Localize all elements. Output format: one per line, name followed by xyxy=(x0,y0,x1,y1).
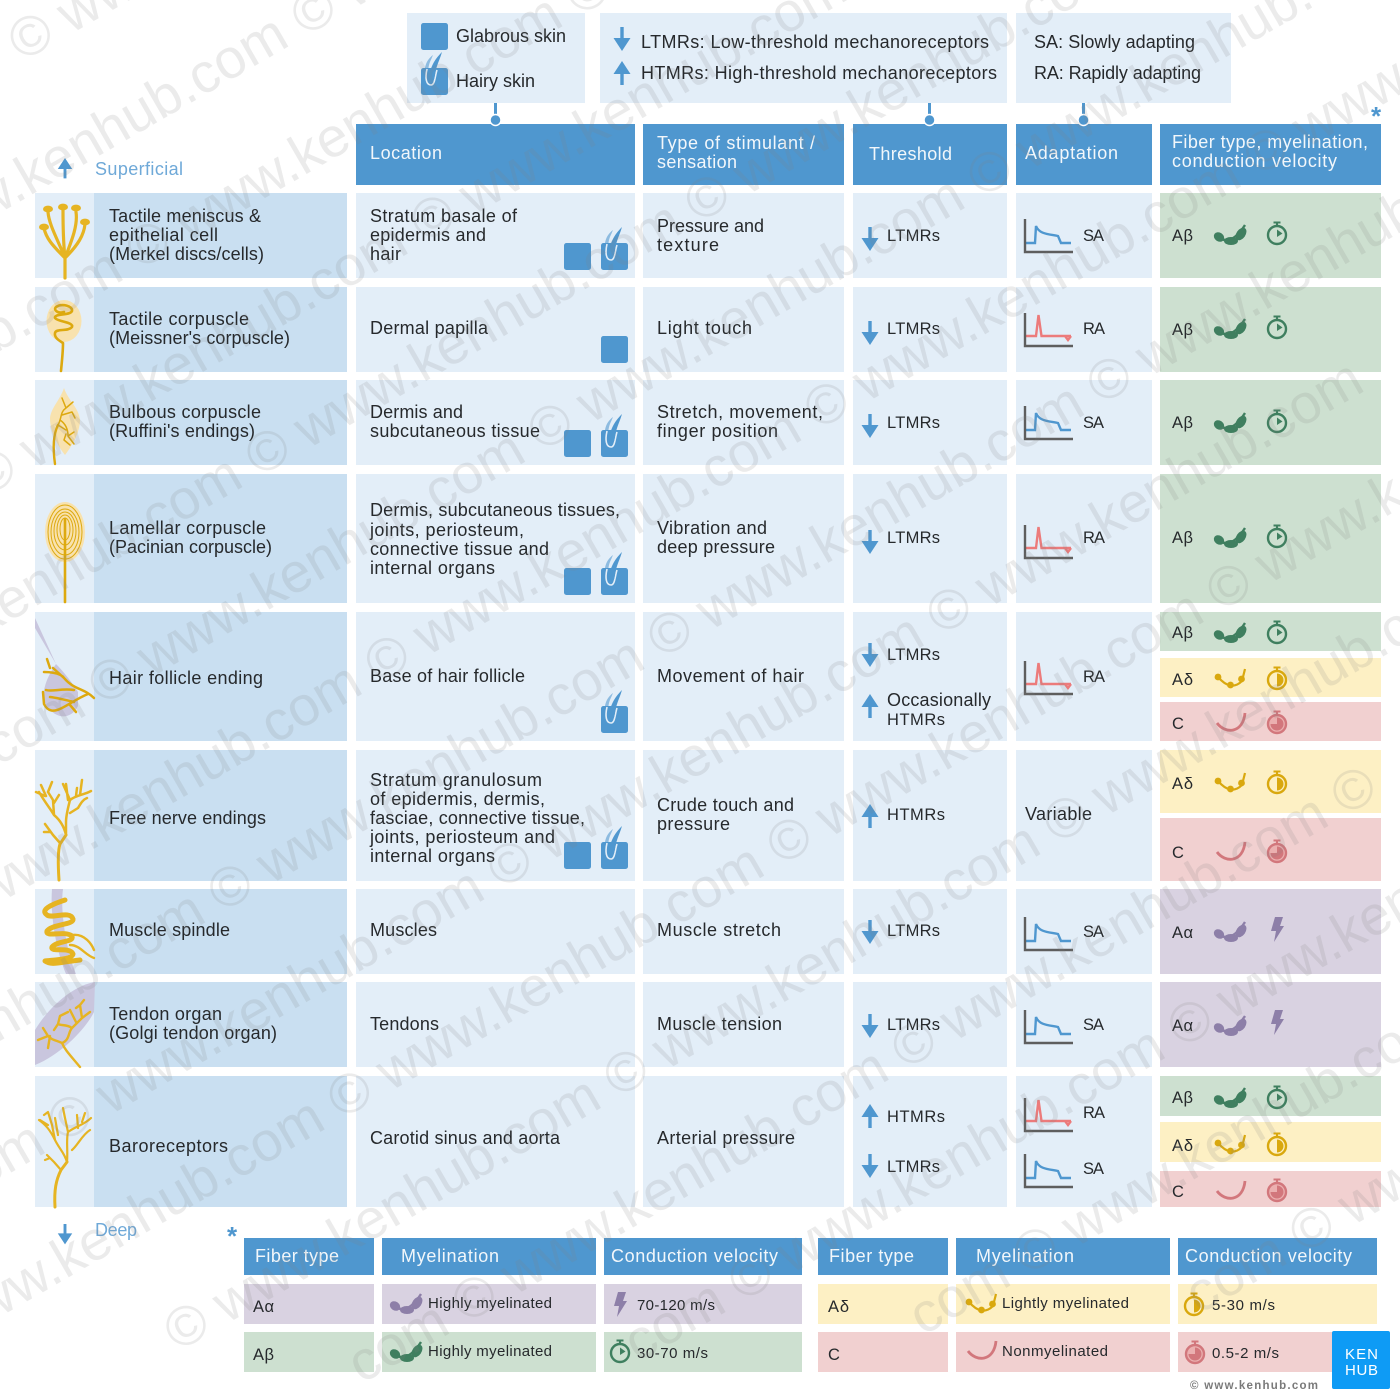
icon: Pacinian corpuscle xyxy=(45,502,85,602)
threshold: HTMRs xyxy=(887,1108,945,1126)
icon: up arrow xyxy=(614,61,630,85)
location xyxy=(369,500,628,595)
icon: hair follicle xyxy=(35,618,94,716)
receptor name xyxy=(109,1004,277,1043)
key table: fiber types A-delta and C: Fiber type xyxy=(829,1246,914,1266)
table header row: Type of stimulant / xyxy=(657,133,815,153)
threshold xyxy=(862,529,940,554)
location: hair xyxy=(370,244,401,264)
adaptation xyxy=(1025,219,1104,252)
key row: C: 0.5-2 m/s xyxy=(1212,1345,1279,1362)
receptor name: (Golgi tendon organ) xyxy=(109,1023,277,1043)
key row: A-alpha: 70-120 m/s xyxy=(637,1297,715,1314)
adaptation xyxy=(1025,313,1105,346)
row: bulbous corpuscle xyxy=(35,380,1381,465)
receptor name: Free nerve endings xyxy=(109,808,266,828)
stimulant: Crude touch and xyxy=(657,795,794,815)
threshold xyxy=(862,920,940,944)
adaptation: RA xyxy=(1083,529,1105,547)
fiber type: Aβ xyxy=(1172,321,1193,339)
threshold xyxy=(862,227,940,251)
receptor name: Lamellar corpuscle xyxy=(109,518,266,538)
location: Stratum basale of xyxy=(370,206,518,226)
row: hair follicle ending xyxy=(35,612,1381,741)
location: epidermis and xyxy=(370,225,486,245)
icon: hairy skin xyxy=(421,52,448,95)
threshold xyxy=(862,414,940,438)
key row: A-delta: Aδ xyxy=(828,1298,849,1316)
fiber type A-beta xyxy=(1160,612,1381,651)
receptor name: epithelial cell xyxy=(109,225,218,245)
receptor name: Bulbous corpuscle xyxy=(109,402,261,422)
receptor name xyxy=(109,402,261,441)
adaptation: SA xyxy=(1083,1160,1104,1178)
fiber type xyxy=(1172,917,1284,942)
location: Dermis and xyxy=(370,402,463,422)
receptor name: (Meissner's corpuscle) xyxy=(109,328,290,348)
icon: Golgi tendon organ xyxy=(35,982,95,1067)
fiber type A-delta xyxy=(1160,1122,1381,1162)
receptor name xyxy=(109,206,264,264)
location: Carotid sinus and aorta xyxy=(370,1128,561,1148)
stimulant: deep pressure xyxy=(657,537,775,557)
key row: A-delta xyxy=(818,1284,1377,1324)
legend: adaptation definitions: SA: Slowly adapting xyxy=(1034,32,1195,52)
location: Dermal papilla xyxy=(370,318,489,338)
key row: A-beta: Highly myelinated xyxy=(428,1343,552,1360)
fiber type: Aβ xyxy=(1172,414,1193,432)
key row: A-beta: 30-70 m/s xyxy=(637,1345,708,1362)
row: tactile meniscus xyxy=(35,193,1381,278)
key row: A-alpha: Highly myelinated xyxy=(428,1295,552,1312)
fiber type A-delta xyxy=(1160,750,1381,813)
fiber type: Aα xyxy=(1172,924,1193,942)
receptor name: Tendon organ xyxy=(109,1004,222,1024)
label: HTMRs: HTMRs: High-threshold mechanoreceptors xyxy=(641,63,997,83)
location: Tendons xyxy=(370,1014,439,1034)
threshold: HTMRs xyxy=(887,711,945,729)
location: internal organs xyxy=(370,558,495,578)
adaptation: RA xyxy=(1083,320,1105,338)
adaptation xyxy=(1025,1010,1104,1043)
key row: A-alpha xyxy=(244,1284,802,1324)
table header row: conduction velocity xyxy=(1172,151,1337,171)
location xyxy=(370,206,628,270)
adaptation xyxy=(1025,661,1105,694)
adaptation xyxy=(1025,917,1104,950)
fiber type xyxy=(1172,524,1286,548)
stimulant: Movement of hair xyxy=(657,666,804,686)
key table: fiber types A-alpha and A-beta: Conduction velocity xyxy=(611,1246,778,1266)
stimulant: Muscle stretch xyxy=(657,920,781,940)
adaptation xyxy=(1025,525,1105,558)
location: Muscles xyxy=(370,920,437,940)
location: joints, periosteum and xyxy=(369,827,555,847)
adaptation: RA xyxy=(1083,668,1105,686)
table header row: Fiber type, myelination, xyxy=(1172,132,1368,152)
copyright: © www.kenhub.com xyxy=(1190,1380,1318,1392)
key row: A-alpha: Aα xyxy=(253,1298,274,1316)
fiber type A-delta: Aδ xyxy=(1172,671,1193,689)
legend: adaptation definitions xyxy=(1016,13,1231,103)
receptor name: Hair follicle ending xyxy=(109,668,263,688)
location: fasciae, connective tissue, xyxy=(370,808,585,828)
stimulant xyxy=(657,402,823,441)
logo: Kenhub xyxy=(1332,1331,1390,1389)
adaptation xyxy=(1025,406,1104,439)
legend connector pins xyxy=(490,103,1089,126)
threshold xyxy=(862,804,945,828)
legend: adaptation definitions: RA: Rapidly adapting xyxy=(1034,63,1201,83)
fiber type C: C xyxy=(1172,1183,1184,1201)
threshold xyxy=(862,1014,940,1038)
location xyxy=(370,666,628,733)
row: free nerve endings xyxy=(35,750,1381,881)
table header row: Adaptation xyxy=(1025,143,1118,163)
key table: fiber types A-delta and C: Myelination xyxy=(976,1246,1074,1266)
receptor name: (Ruffini's endings) xyxy=(109,421,255,441)
asterisk top: * xyxy=(1371,101,1382,131)
location: Base of hair follicle xyxy=(370,666,525,686)
threshold: LTMRs xyxy=(887,414,940,432)
fiber type A-delta: Aδ xyxy=(1172,775,1193,793)
location xyxy=(370,318,628,363)
icon: glabrous skin xyxy=(421,23,448,50)
stimulant xyxy=(657,216,764,255)
fiber type A-beta: Aβ xyxy=(1172,624,1193,642)
row: tendon organ xyxy=(35,982,1381,1067)
fiber type C: C xyxy=(1172,715,1184,733)
icon: Ruffini ending xyxy=(50,388,80,464)
fiber type C xyxy=(1160,702,1381,741)
table header row xyxy=(356,124,1381,185)
stimulant: texture xyxy=(657,235,719,255)
stimulant: Arterial pressure xyxy=(657,1128,795,1148)
stimulant: Light touch xyxy=(657,318,752,338)
fiber type: Aβ xyxy=(1172,529,1193,547)
icon: down arrow xyxy=(614,27,630,51)
threshold: LTMRs xyxy=(887,646,940,664)
stimulant xyxy=(657,795,794,834)
asterisk bottom: * xyxy=(227,1221,238,1251)
key table: fiber types A-delta and C xyxy=(818,1238,1377,1372)
key row: A-delta: Lightly myelinated xyxy=(1002,1295,1129,1312)
location xyxy=(370,402,628,457)
stimulant: finger position xyxy=(657,421,778,441)
deep direction xyxy=(58,1220,137,1244)
key table: fiber types A-alpha and A-beta: Myelination xyxy=(401,1246,499,1266)
fiber type xyxy=(1172,1010,1284,1036)
key row: A-beta xyxy=(244,1332,802,1372)
receptor name xyxy=(109,518,272,557)
row: baroreceptors xyxy=(35,1076,1381,1207)
location: joints, periosteum, xyxy=(369,520,524,540)
table header row: Threshold xyxy=(869,144,952,164)
icon: baroreceptor xyxy=(39,1108,91,1207)
threshold xyxy=(862,320,940,345)
superficial direction xyxy=(58,158,183,179)
row: tactile corpuscle xyxy=(35,287,1381,372)
threshold: Occasionally xyxy=(887,690,991,710)
stimulant: pressure xyxy=(657,814,730,834)
fiber type A-beta xyxy=(1160,1076,1381,1116)
fiber type C: C xyxy=(1172,844,1184,862)
threshold: LTMRs xyxy=(887,1016,940,1034)
location: Dermis, subcutaneous tissues, xyxy=(370,500,620,520)
key row: C: Nonmyelinated xyxy=(1002,1343,1108,1360)
threshold: LTMRs xyxy=(887,320,940,338)
legend: threshold definitions xyxy=(600,13,1007,103)
receptor name: Baroreceptors xyxy=(109,1136,228,1156)
adaptation: SA xyxy=(1083,1016,1104,1034)
receptor name: Tactile meniscus & xyxy=(109,206,261,226)
key row: A-beta: Aβ xyxy=(253,1346,274,1364)
fiber type C xyxy=(1160,1171,1381,1207)
key table: fiber types A-alpha and A-beta: Fiber type xyxy=(255,1246,339,1266)
superficial direction: Superficial xyxy=(95,159,183,179)
receptor name xyxy=(109,309,290,348)
location: of epidermis, dermis, xyxy=(370,789,545,809)
key row: A-delta: 5-30 m/s xyxy=(1212,1297,1275,1314)
logo: Kenhub: HUB xyxy=(1345,1362,1378,1379)
stimulant: Stretch, movement, xyxy=(657,402,823,422)
stimulant: Pressure and xyxy=(657,216,764,236)
adaptation: SA xyxy=(1083,923,1104,941)
adaptation: RA xyxy=(1083,1104,1105,1122)
adaptation: SA xyxy=(1083,414,1104,432)
fiber type C xyxy=(1160,818,1381,881)
threshold: LTMRs xyxy=(887,922,940,940)
label: hairy skin: Hairy skin xyxy=(456,71,535,91)
row: lamellar corpuscle xyxy=(35,474,1381,603)
icon: muscle spindle xyxy=(45,889,94,974)
icon: Meissner corpuscle xyxy=(46,300,82,371)
key row: C xyxy=(818,1332,1377,1372)
stimulant xyxy=(657,518,775,557)
location: Stratum granulosum xyxy=(370,770,542,790)
fiber type: Aα xyxy=(1172,1017,1193,1035)
key table: fiber types A-alpha and A-beta xyxy=(244,1238,802,1372)
adaptation xyxy=(1025,1098,1105,1187)
table header row: sensation xyxy=(657,152,737,172)
icon: Merkel cell xyxy=(39,204,90,278)
threshold xyxy=(862,1104,945,1178)
location: connective tissue and xyxy=(370,539,549,559)
fiber type xyxy=(1172,222,1286,245)
receptor name: (Pacinian corpuscle) xyxy=(109,537,272,557)
stimulant: Vibration and xyxy=(657,518,767,538)
threshold: LTMRs xyxy=(887,227,940,245)
row: muscle spindle xyxy=(35,889,1381,974)
receptor name: (Merkel discs/cells) xyxy=(109,244,264,264)
legend: skin types xyxy=(407,13,585,103)
location xyxy=(369,770,628,869)
label: LTMRs: LTMRs: Low-threshold mechanoreceptors xyxy=(641,32,989,52)
deep direction: Deep xyxy=(95,1220,137,1240)
fiber type A-delta xyxy=(1160,658,1381,697)
threshold: LTMRs xyxy=(887,1158,940,1176)
fiber type A-beta: Aβ xyxy=(1172,1089,1193,1107)
key table: fiber types A-delta and C: Conduction velocity xyxy=(1185,1246,1352,1266)
label: glabrous skin: Glabrous skin xyxy=(456,26,566,46)
key row: C: C xyxy=(828,1346,840,1364)
logo: Kenhub: KEN xyxy=(1345,1346,1378,1363)
fiber type A-delta: Aδ xyxy=(1172,1137,1193,1155)
location: internal organs xyxy=(370,846,495,866)
receptor name: Tactile corpuscle xyxy=(109,309,249,329)
fiber type: Aβ xyxy=(1172,227,1193,245)
stimulant: Muscle tension xyxy=(657,1014,782,1034)
threshold xyxy=(862,643,991,729)
table header row: Location xyxy=(370,143,442,163)
threshold: HTMRs xyxy=(887,806,945,824)
location: subcutaneous tissue xyxy=(370,421,540,441)
fiber type xyxy=(1172,410,1286,433)
receptor name: Muscle spindle xyxy=(109,920,230,940)
threshold: LTMRs xyxy=(887,529,940,547)
adaptation: SA xyxy=(1083,227,1104,245)
watermark: com © www.kenhub.com © www.kenhub.com © xyxy=(337,753,1386,1395)
fiber type xyxy=(1172,316,1286,339)
adaptation: Variable xyxy=(1025,804,1092,824)
icon: free nerve ending xyxy=(36,780,91,880)
